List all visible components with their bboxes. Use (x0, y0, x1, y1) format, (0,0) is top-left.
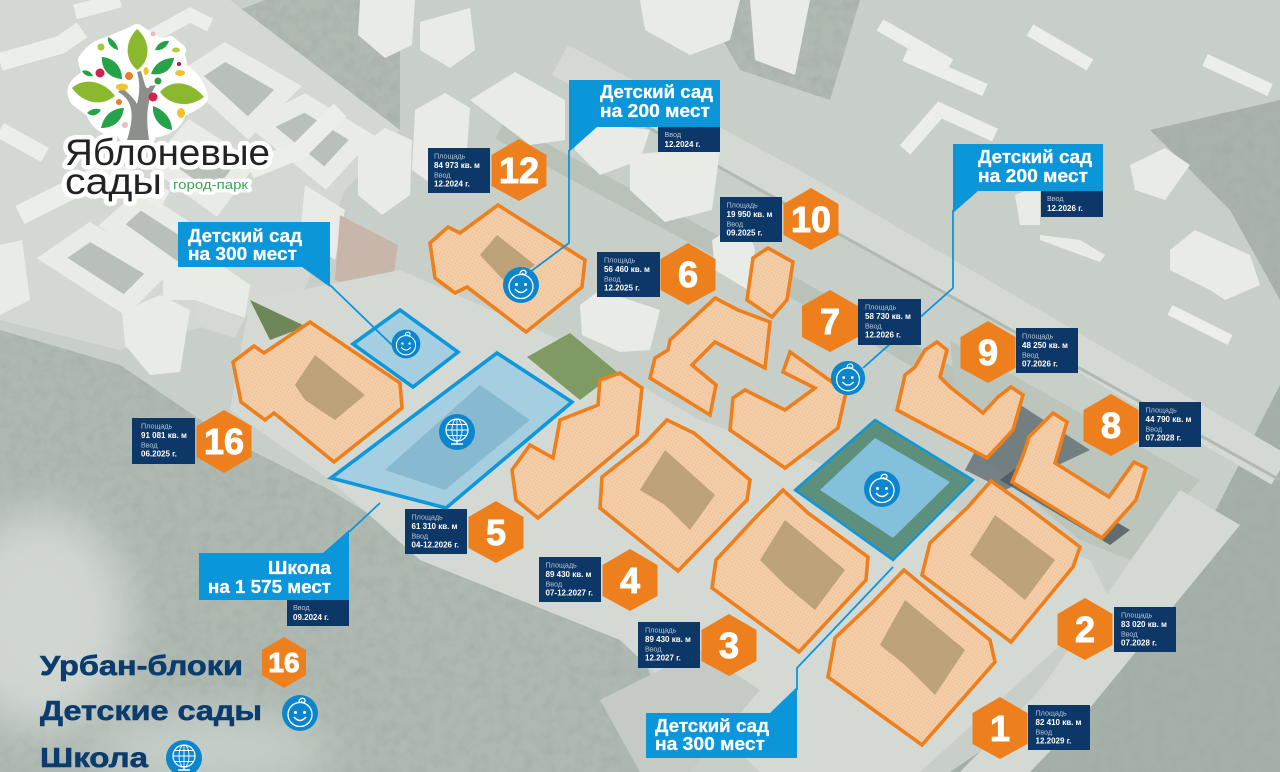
callout: kindergarten 200 right: 12.2026 г. (1047, 204, 1083, 213)
marker 9: 07.2026 г. (1022, 360, 1058, 368)
marker 12: 12.2024 г. (434, 180, 470, 188)
marker 2: Площадь (1121, 610, 1153, 620)
marker 4 (539, 549, 658, 611)
marker 10: 19 950 кв. м (726, 210, 773, 219)
marker 2: 07.2028 г. (1121, 638, 1157, 648)
marker 5: Ввод (412, 532, 429, 540)
callout: kindergarten 300 bottom: Детский сад (655, 716, 770, 736)
site ground and landscaping (230, 270, 1130, 772)
block 2 (922, 481, 1080, 642)
callout: school: 09.2024 г. (293, 613, 329, 622)
marker 8: Площадь (1146, 406, 1177, 414)
marker 8: 8 (1101, 405, 1121, 446)
marker 6 (597, 243, 716, 305)
marker 5: Площадь (412, 512, 443, 522)
marker 16: 16 (204, 421, 244, 462)
logo wordmark (65, 132, 270, 202)
marker 8: Ввод (1146, 424, 1163, 434)
icon: kindergarten centre (864, 471, 900, 507)
logo halo (73, 30, 202, 140)
icon: kindergarten block 7 (831, 361, 865, 395)
callout: kindergarten 200 top: 12.2024 г. (664, 140, 700, 149)
icon: school globe (439, 414, 475, 450)
marker 6: Площадь (604, 256, 636, 264)
marker 4: 07-12.2027 г. (546, 588, 593, 598)
blue zones: kindergartens and school (331, 310, 973, 560)
block 16 (233, 322, 402, 462)
block 9 (897, 342, 1023, 458)
marker 1 (972, 697, 1090, 759)
marker 12: Ввод (434, 170, 451, 180)
callout: school: на 1 575 мест (208, 577, 331, 597)
icon: kindergarten top (392, 330, 420, 358)
marker 16: Площадь (141, 422, 173, 430)
marker 16 (132, 410, 252, 473)
marker 1: Ввод (1036, 728, 1053, 736)
marker 5 (405, 501, 524, 563)
logo (40, 29, 318, 772)
marker 1: 82 410 кв. м (1036, 718, 1082, 727)
callout: kindergarten 200 top: Ввод (664, 130, 682, 139)
marker 5: 5 (486, 512, 506, 553)
marker 2: 83 020 кв. м (1121, 620, 1167, 629)
marker 8: 07.2028 г. (1146, 434, 1181, 442)
callout: school (199, 530, 349, 626)
marker 3: Площадь (645, 626, 677, 634)
marker 4: 4 (620, 560, 640, 601)
marker 6: 56 460 кв. м (604, 265, 650, 274)
callout: kindergarten 200 right: на 200 мест (978, 166, 1088, 186)
orange urban blocks (233, 205, 1146, 745)
logo wordmark: город-парк (173, 178, 249, 192)
zone: kindergarten top (353, 310, 458, 387)
leader lines (330, 150, 953, 690)
marker 4: Площадь (546, 560, 577, 570)
marker 16: 06.2025 г. (141, 450, 177, 458)
marker 9 (960, 321, 1078, 383)
block 4 (600, 420, 750, 571)
marker 8 (1084, 394, 1201, 456)
block 5 (512, 373, 642, 518)
block 8 (1012, 413, 1146, 538)
marker 9: 9 (978, 332, 998, 373)
logo wordmark: Яблоневые (65, 132, 270, 173)
block 1 (828, 570, 995, 745)
marker 7: 12.2026 г. (865, 330, 901, 340)
marker 2 (1058, 598, 1176, 660)
marker 10: Ввод (726, 220, 744, 228)
legend (40, 637, 318, 772)
block 3 (712, 490, 868, 652)
callout: kindergarten 200 top: Детский сад (600, 82, 714, 102)
legend: school (40, 740, 202, 772)
marker 10 (720, 188, 838, 250)
marker 10: Площадь (726, 200, 758, 210)
callout: kindergarten 300 top: Детский сад (188, 226, 303, 246)
block 6 (650, 298, 770, 415)
marker 4: 89 430 кв. м (546, 570, 592, 579)
marker 2: Ввод (1121, 630, 1138, 638)
marker 1: 1 (990, 708, 1010, 749)
marker 3: 12.2027 г. (645, 654, 681, 662)
callout: school: Школа (268, 558, 332, 578)
marker 6: 12.2025 г. (604, 284, 640, 292)
callout: kindergarten 200 right: Детский сад (978, 147, 1093, 167)
callout: kindergarten 300 bottom (646, 687, 797, 758)
marker 2: 2 (1075, 609, 1095, 650)
marker 7: Площадь (865, 302, 897, 312)
marker 7: 7 (820, 301, 840, 342)
block 10 (747, 248, 793, 317)
zone: school (331, 353, 572, 508)
marker 10: 10 (791, 199, 831, 240)
marker 12: Площадь (434, 152, 466, 160)
block 7 (730, 352, 846, 468)
marker 5: 04-12.2026 г. (412, 540, 459, 550)
marker 3: 89 430 кв. м (645, 635, 691, 644)
marker 3: 3 (719, 625, 739, 666)
marker 4: Ввод (546, 580, 563, 588)
marker 7 (802, 290, 921, 352)
legend: kindergartens (40, 695, 318, 731)
marker 12: 12 (499, 150, 539, 191)
legend: urban blocks (40, 637, 306, 688)
marker 16: Ввод (141, 440, 158, 450)
callout: kindergarten 300 bottom: на 300 мест (655, 734, 765, 754)
callout: kindergarten 300 top: на 300 мест (188, 244, 297, 264)
marker 9: Ввод (1022, 350, 1039, 360)
legend: kindergartens: Детские сады (40, 695, 262, 726)
marker 6: Ввод (604, 274, 621, 284)
marker 5: 61 310 кв. м (412, 522, 458, 531)
marker 7: Ввод (865, 322, 882, 330)
marker 16: 91 081 кв. м (141, 431, 187, 440)
marker 6: 6 (678, 254, 698, 295)
marker 9: Площадь (1022, 332, 1054, 340)
callout: kindergarten 200 right: Ввод (1047, 194, 1064, 203)
logo wordmark: сады (65, 161, 162, 202)
legend: urban blocks: Урбан-блоки (40, 650, 243, 681)
marker 7: 58 730 кв. м (865, 312, 911, 321)
callout: kindergarten 300 top (178, 222, 330, 287)
marker 1: 12.2029 г. (1036, 736, 1071, 746)
icon: kindergarten block 12 (503, 267, 539, 303)
callout: kindergarten 200 top: на 200 мест (600, 101, 710, 121)
marker 9: 48 250 кв. м (1022, 341, 1068, 350)
marker 1: Площадь (1036, 708, 1067, 718)
marker 10: 09.2025 г. (726, 228, 762, 238)
callout: kindergarten 200 top (569, 80, 720, 152)
zone: kindergarten centre (795, 420, 973, 560)
marker 8: 44 790 кв. м (1146, 415, 1192, 424)
marker 3 (638, 614, 756, 676)
block 12 (430, 205, 585, 332)
callout: school: Ввод (293, 603, 310, 612)
marker 12: 84 973 кв. м (434, 161, 480, 170)
logo tree (65, 29, 270, 202)
marker 3: Ввод (645, 644, 662, 654)
legend: urban blocks: 16 (268, 647, 300, 678)
marker 12 (428, 139, 546, 201)
callout: kindergarten 200 right (953, 144, 1103, 217)
